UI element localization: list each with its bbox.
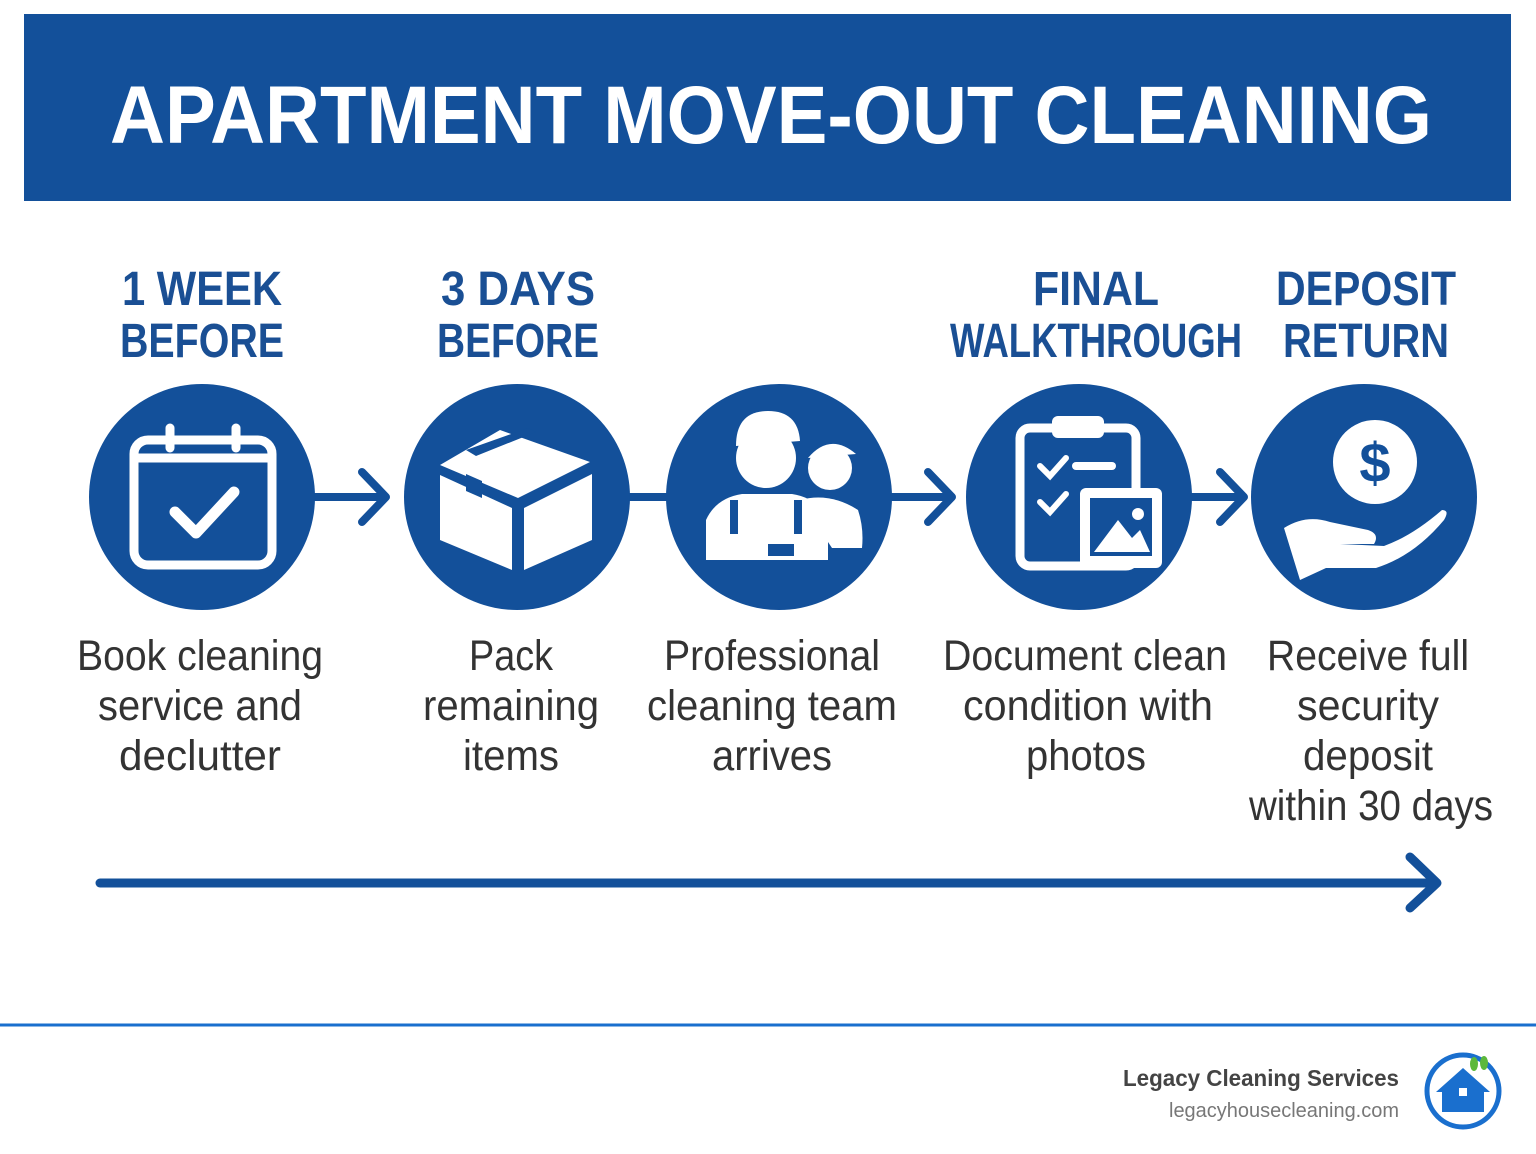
text: step descriptions: condition with [963,682,1213,730]
text: step descriptions: service and [98,682,302,730]
footer brand text: legacyhousecleaning.com [1169,1100,1399,1122]
title: APARTMENT MOVE-OUT CLEANING [110,70,1432,161]
header banner [24,14,1511,201]
text: step descriptions: cleaning team [647,682,897,730]
heading: 1 week before [120,263,284,368]
icon: cleaning team [666,384,892,610]
text: step descriptions [77,632,1493,830]
heading: 3 days before: BEFORE [437,315,599,368]
icon: calendar [89,384,315,610]
heading: 3 days before: 3 DAYS [441,263,595,316]
connector arrows between circles [310,472,1244,522]
icon: logo [1427,1055,1499,1127]
heading: 1 week before: 1 WEEK [122,263,282,316]
text: step descriptions: Book cleaning [77,632,323,680]
text: step descriptions: photos [1026,732,1146,780]
icon: clipboard with photo [966,384,1192,610]
arrow: timeline [100,857,1437,908]
icon: hand with coin: $ [1359,431,1391,494]
icon: hand with coin [1251,384,1477,610]
text: step descriptions: arrives [712,732,832,780]
text: step descriptions: security [1297,682,1439,730]
heading: deposit return [1276,263,1456,368]
text: step descriptions: items [463,732,559,780]
heading: 3 days before [437,263,599,368]
heading: final walkthrough: FINAL [1033,263,1159,316]
text: step descriptions: Document clean [943,632,1227,680]
heading: deposit return: DEPOSIT [1276,263,1456,316]
text: step descriptions: deposit [1303,732,1433,780]
text: step descriptions: Professional [664,632,880,680]
heading: final walkthrough [950,263,1242,368]
text: step descriptions: remaining [423,682,599,730]
footer brand text: Legacy Cleaning Services [1123,1065,1399,1091]
icon: box [404,384,630,610]
heading: deposit return: RETURN [1283,315,1449,368]
text: step descriptions: Pack [469,632,553,680]
text: step descriptions: declutter [119,732,281,780]
footer brand text [1123,1065,1399,1122]
text: step descriptions: Receive full [1267,632,1469,680]
heading: final walkthrough: WALKTHROUGH [950,315,1242,368]
heading: 1 week before: BEFORE [120,315,284,368]
text: step descriptions: within 30 days [1248,782,1493,830]
